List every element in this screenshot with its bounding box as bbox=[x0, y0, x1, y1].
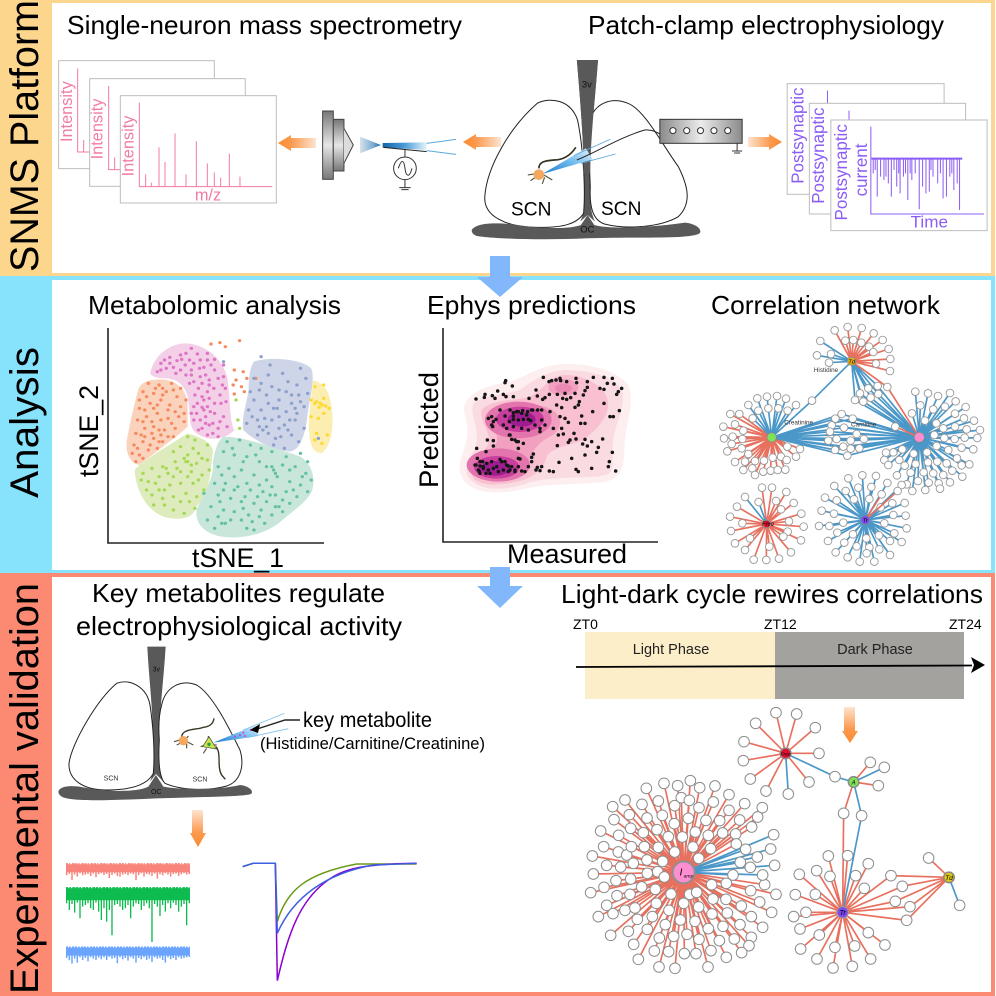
SCN slice with metabolite puff: SCN bbox=[193, 777, 207, 784]
tSNE cluster scatter plot bbox=[74, 328, 333, 573]
heading: Ephys predictions: Ephys predictions bbox=[427, 290, 636, 320]
SCN slice with metabolite puff: 3v bbox=[153, 667, 161, 674]
heading: light-dark cycle: Light-dark cycle rewires correlations bbox=[561, 579, 983, 609]
hub nodes: A bbox=[851, 780, 856, 786]
postsynaptic current traces stack: Postsynaptic bbox=[809, 107, 828, 204]
mass spectra stack bbox=[58, 61, 276, 205]
mass spectrometer inlet and nanospray bbox=[323, 111, 456, 190]
heading: key metabolites: Key metabolites regulate bbox=[92, 578, 385, 608]
hub nodes and metabolite labels: Td bbox=[848, 359, 856, 365]
tSNE cluster scatter plot: tSNE_1 bbox=[192, 543, 284, 573]
Imp subnetwork, red edges bbox=[591, 781, 776, 968]
Rs subnetwork bbox=[743, 713, 878, 791]
heading: key metabolites bbox=[76, 578, 402, 641]
heading: correlation network: Correlation network bbox=[711, 290, 941, 320]
arrow: to rewired network bbox=[842, 707, 858, 743]
mass spectra stack: Intensity bbox=[89, 98, 107, 159]
panel: SNMS Platform bbox=[1, 0, 993, 275]
heading: metabolomic analysis: Metabolomic analysis bbox=[88, 290, 341, 320]
SCN slice with metabolite puff: SCN bbox=[104, 775, 118, 782]
averaged EPSC curves bbox=[243, 863, 417, 981]
Imp subnetwork, blue edges bbox=[684, 835, 775, 875]
rewired network bbox=[591, 713, 960, 968]
density scatter plot: predicted vs measured bbox=[414, 328, 658, 569]
mass spectra stack: m/z bbox=[195, 187, 221, 205]
panel: Analysis bbox=[1, 278, 993, 573]
hub nodes bbox=[673, 748, 954, 918]
hub nodes: Tr bbox=[839, 908, 846, 917]
SCN slice with metabolite puff bbox=[58, 647, 288, 800]
Cr subnetwork, red edges bbox=[723, 414, 800, 475]
heading: key metabolites: electrophysiological activity bbox=[76, 611, 402, 641]
callout: key metabolite: key metabolite bbox=[303, 709, 432, 732]
Cr subnetwork, blue edges bbox=[748, 396, 919, 456]
arrow: platform to analysis bbox=[477, 256, 523, 297]
callout: key metabolite: (Histidine/Carnitine/Creatinine) bbox=[260, 735, 485, 753]
light-dark phase timeline bbox=[573, 616, 985, 699]
Tr subnetwork bbox=[819, 475, 907, 562]
postsynaptic current traces stack: Time bbox=[911, 212, 948, 231]
postsynaptic current traces stack: current bbox=[852, 143, 871, 196]
Td subnetwork, red edges bbox=[835, 327, 919, 437]
panel: Experimental validation bbox=[1, 575, 993, 994]
Tr subnetwork bbox=[794, 782, 949, 968]
postsynaptic current traces stack bbox=[787, 84, 987, 231]
callout: key metabolite bbox=[250, 709, 485, 753]
arrow: analysis to validation bbox=[477, 567, 523, 608]
Fr subnetwork bbox=[730, 488, 804, 560]
SCN slice with patched neuron: OC bbox=[580, 224, 595, 234]
hub nodes: amp bbox=[684, 873, 694, 879]
correlation network bbox=[723, 327, 980, 562]
SCN slice with patched neuron: SCN bbox=[601, 199, 641, 220]
SCN slice with patched neuron bbox=[472, 60, 742, 239]
mass spectra stack: Intensity bbox=[120, 115, 138, 176]
hub nodes: Freq bbox=[781, 751, 791, 757]
SCN slice with patched neuron: SCN bbox=[511, 200, 551, 221]
heading: SNMS Platform side label: SNMS Platform bbox=[3, 0, 47, 272]
light-dark phase timeline: Dark Phase bbox=[837, 642, 913, 658]
hub nodes and metabolite labels: Carnitine bbox=[851, 422, 877, 429]
arrow: sample to mass spec bbox=[463, 134, 501, 150]
heading: Analysis side label: Analysis bbox=[3, 347, 47, 498]
arrow: recording output bbox=[748, 134, 782, 150]
postsynaptic current traces stack: Postsynaptic bbox=[789, 87, 808, 184]
Td subnetwork, blue edges bbox=[772, 341, 919, 437]
hub nodes and metabolite labels: Tr bbox=[863, 518, 869, 524]
light-dark phase timeline: Light Phase bbox=[633, 642, 709, 658]
postsynaptic current traces stack: Postsynaptic bbox=[832, 124, 851, 220]
hub nodes: Td bbox=[945, 875, 953, 882]
current traces bbox=[66, 864, 190, 964]
tSNE cluster scatter plot: tSNE_2 bbox=[74, 385, 104, 477]
Jamp subnetwork bbox=[884, 392, 980, 491]
arrow: spectra from ion source bbox=[278, 135, 316, 151]
heading: single-neuron mass spectrometry: Single-neuron mass spectrometry bbox=[67, 10, 462, 40]
light-dark phase timeline: ZT24 bbox=[949, 616, 982, 632]
heading: patch-clamp electrophysiology: Patch-clamp electrophysiology bbox=[588, 10, 944, 40]
density scatter plot: predicted vs measured: Predicted bbox=[414, 372, 444, 488]
hub nodes and metabolite labels bbox=[762, 358, 924, 528]
hub nodes and metabolite labels: Histidine bbox=[814, 367, 839, 374]
heading: experimental validation side label: Experimental validation bbox=[3, 583, 47, 994]
density scatter plot: predicted vs measured: Measured bbox=[507, 539, 627, 569]
SCN slice with metabolite puff: OC bbox=[151, 789, 161, 796]
hub nodes and metabolite labels: Creatinine bbox=[784, 420, 814, 427]
mass spectra stack: Intensity bbox=[58, 80, 76, 142]
light-dark phase timeline: ZT0 bbox=[573, 616, 598, 632]
SCN slice with patched neuron: 3v bbox=[582, 79, 592, 89]
hub nodes and metabolite labels: Freq bbox=[762, 522, 775, 528]
hub nodes: I bbox=[680, 867, 683, 878]
light-dark phase timeline: ZT12 bbox=[764, 616, 797, 632]
arrow: SCN to traces bbox=[190, 810, 206, 847]
